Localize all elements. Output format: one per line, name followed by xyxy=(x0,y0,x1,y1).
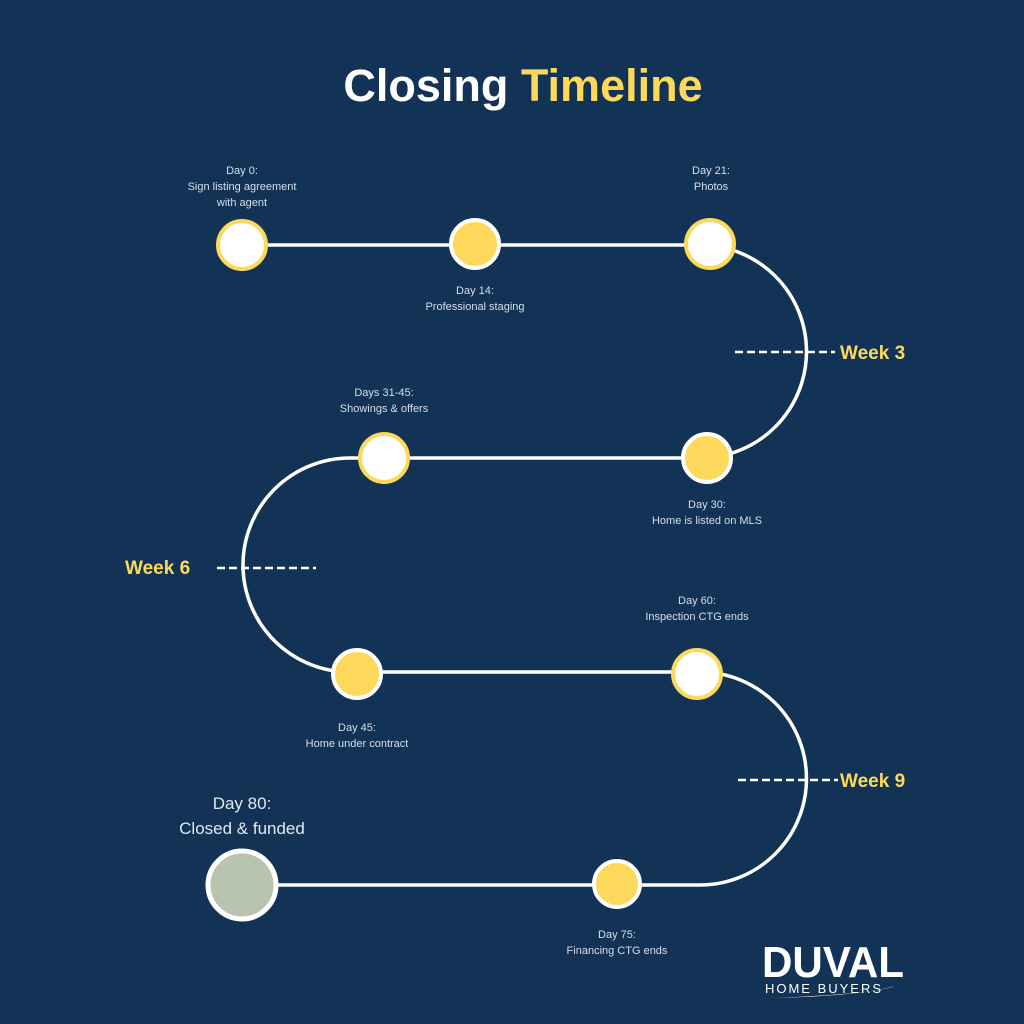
label: day 0: Day 0: xyxy=(226,165,258,177)
node: day 45 xyxy=(333,650,381,698)
label: day 0: with agent xyxy=(216,197,267,209)
label: day 14: Day 14: xyxy=(456,285,494,297)
week 9 marker: Week 9 xyxy=(840,771,905,792)
label: day 75: Financing CTG ends xyxy=(567,945,668,957)
label: day 80: Day 80: xyxy=(213,794,271,813)
label: day 80: Closed & funded xyxy=(179,819,305,838)
label: days 31-45: Days 31-45: xyxy=(354,387,414,399)
label: day 0: Sign listing agreement xyxy=(188,181,296,193)
label: day 60: Inspection CTG ends xyxy=(645,611,749,623)
node: day 21 xyxy=(686,220,734,268)
label: day 30: Day 30: xyxy=(688,499,726,511)
node: day 80 xyxy=(208,851,276,919)
label: day 45: Day 45: xyxy=(338,722,376,734)
week 3 marker: Week 3 xyxy=(840,343,905,364)
node: day 60 xyxy=(673,650,721,698)
label: day 30: Home is listed on MLS xyxy=(652,515,762,527)
title: Closing Timeline xyxy=(343,60,703,111)
label: day 45: Home under contract xyxy=(306,738,408,750)
label: days 31-45: Showings & offers xyxy=(340,403,429,415)
timeline path xyxy=(242,245,806,885)
label: day 21: Day 21: xyxy=(692,165,730,177)
logo: HOME BUYERS xyxy=(765,981,883,996)
week 6 marker: Week 6 xyxy=(125,558,190,579)
label: day 14: Professional staging xyxy=(425,301,525,313)
logo: DUVAL xyxy=(762,938,904,987)
node: day 0 xyxy=(218,221,266,269)
node: day 14 xyxy=(451,220,499,268)
label: day 60: Day 60: xyxy=(678,595,716,607)
label: day 75: Day 75: xyxy=(598,929,636,941)
label: day 21: Photos xyxy=(694,181,729,193)
node: day 30 xyxy=(683,434,731,482)
node: days 31-45 xyxy=(360,434,408,482)
node: day 75 xyxy=(594,861,640,907)
